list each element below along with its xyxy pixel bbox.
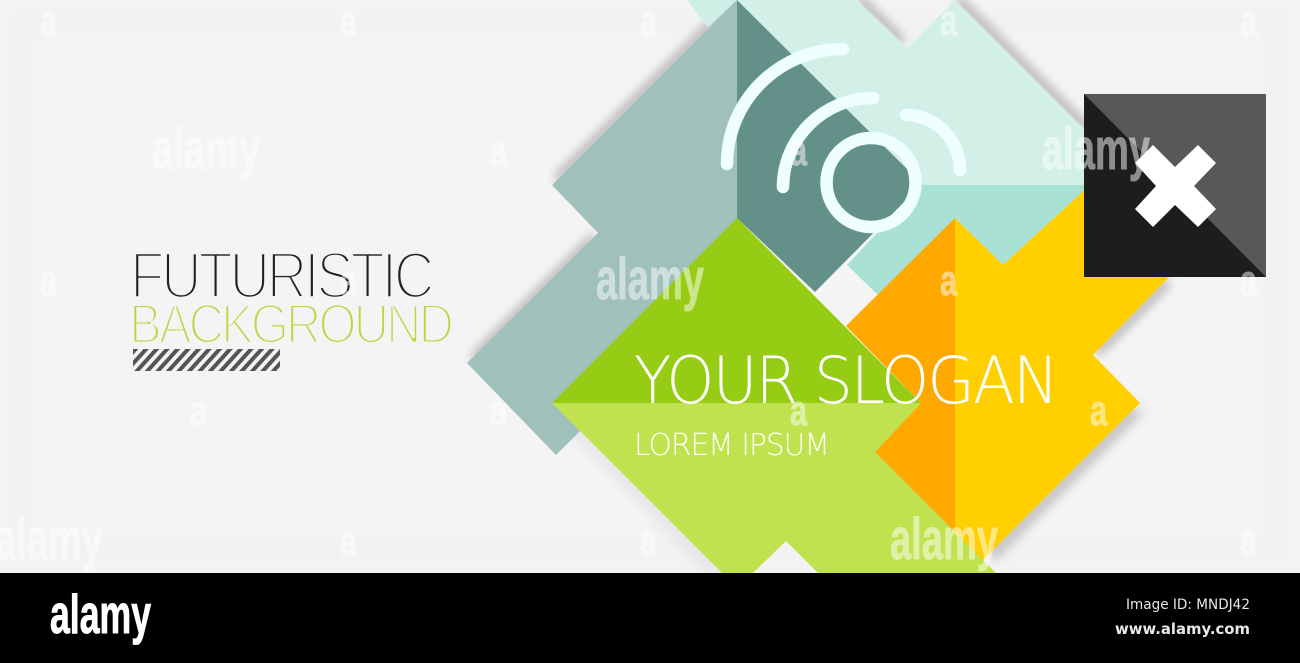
footer logo: alamy (50, 583, 151, 645)
watermark: small letters: a (640, 517, 658, 565)
shape: light mint arrow (737, 0, 1092, 185)
watermark: alamy words: alamy (152, 117, 260, 182)
watermark: small letters: a (340, 257, 358, 305)
shape: mid mint fold (847, 185, 1090, 295)
ring: outer arc (727, 49, 843, 164)
footer bar (0, 573, 1300, 663)
watermark: small letters: a (1090, 387, 1108, 435)
watermark: alamy words: alamy (1042, 117, 1150, 182)
watermark: small letters: a (190, 387, 208, 435)
watermark: alamy words: alamy (596, 247, 704, 312)
button: white cross (1135, 145, 1216, 227)
shape: yellow arrow (955, 185, 1168, 563)
watermark: small letters: a (1240, 257, 1258, 305)
shape: light green arrow (552, 403, 996, 573)
watermark: small letters: a (340, 517, 358, 565)
watermark: alamy words (0, 117, 1150, 572)
shape: grey teal arrow (467, 0, 737, 455)
hatched bar (133, 349, 280, 371)
website url: www.alamy.com (1115, 620, 1250, 638)
watermark: small letters: a (940, 257, 958, 305)
shape: small mint corner (687, 0, 737, 27)
shape: orange fold (846, 218, 955, 532)
ring: middle arc (783, 98, 873, 187)
watermark: small letters: a (40, 257, 58, 305)
image id: Image ID: MNDJ42 (1126, 597, 1250, 613)
watermark: small letters: a (1240, 517, 1258, 565)
icon: signal rings (727, 49, 960, 227)
watermark: small letters: a (790, 127, 808, 175)
shape: dark teal panel (737, 0, 922, 292)
button: black diagonal half (1084, 94, 1266, 277)
ring: inner arc (906, 115, 960, 170)
watermark: small letters (40, 0, 1258, 565)
ring: centre circle (826, 138, 916, 227)
watermark: small letters: a (490, 127, 508, 175)
icon: close button (1084, 94, 1266, 277)
watermark: alamy words: alamy (890, 507, 998, 572)
shape: green triangle (552, 218, 921, 403)
shadows (473, 0, 1168, 575)
watermark: small letters: a (490, 387, 508, 435)
heading: futuristic: FUTURISTIC (130, 238, 433, 312)
button: dark grey square (1084, 94, 1266, 277)
heading: background: BACKGROUND (129, 292, 452, 355)
slogan: YOUR SLOGAN (634, 344, 1057, 419)
watermark: small letters: a (790, 387, 808, 435)
sub slogan: LOREM IPSUM (634, 428, 829, 463)
